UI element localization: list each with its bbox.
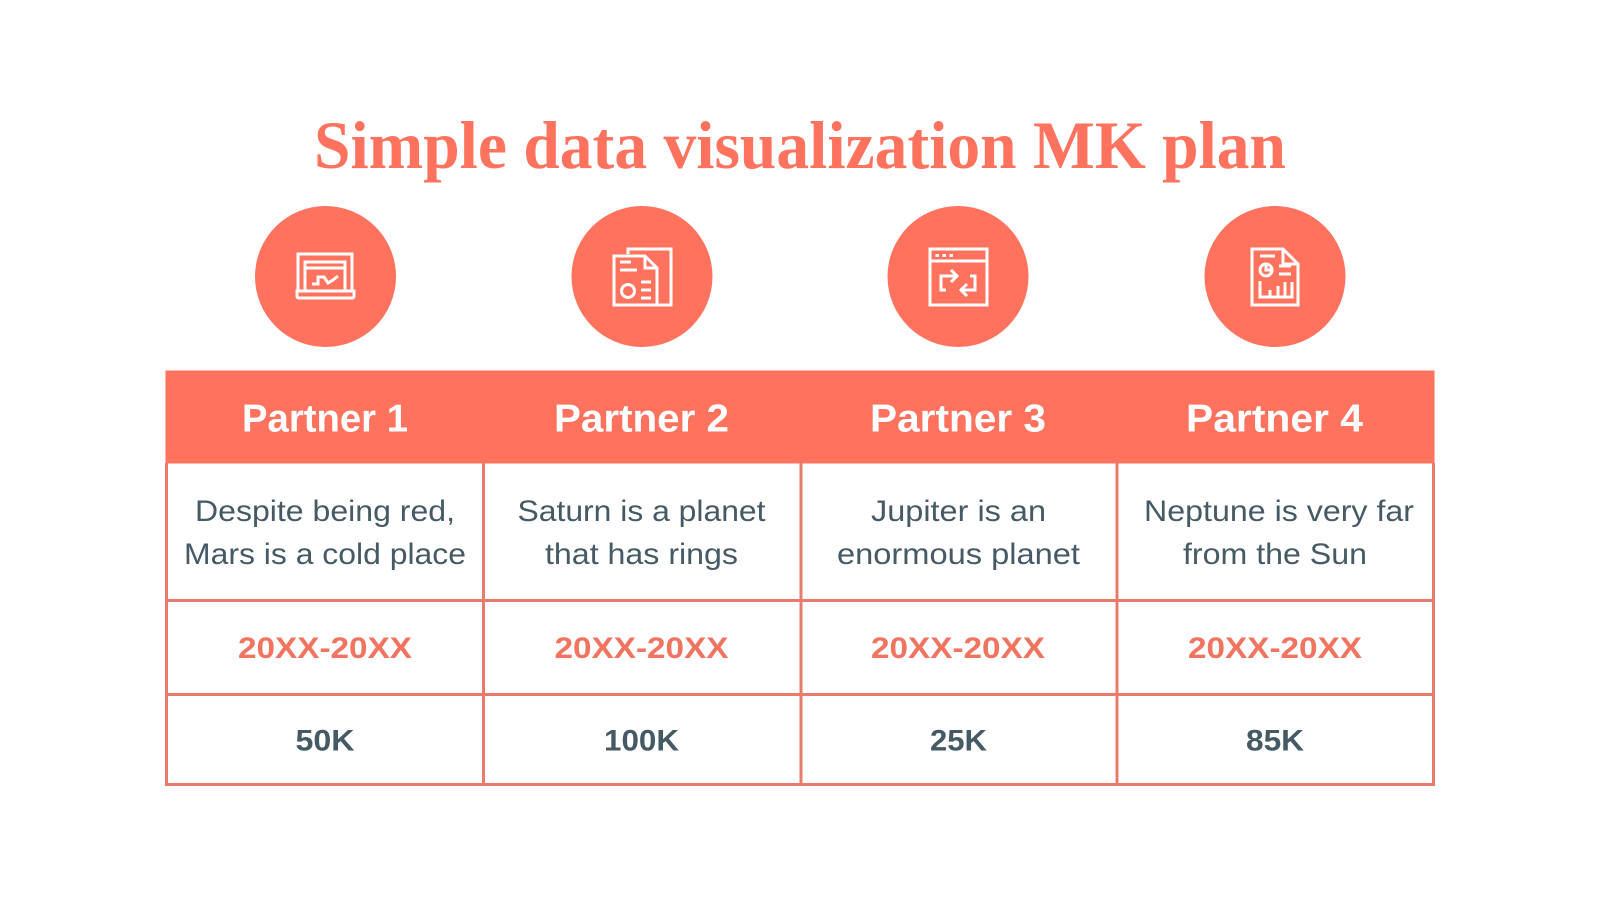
column: Partner 3: Jupiter is an — [871, 495, 1046, 528]
column: Partner 2: Partner 2 — [554, 398, 729, 440]
column: Partner 4: 85K — [1246, 724, 1304, 758]
column: Partner 3: 20XX-20XX — [871, 632, 1045, 665]
column: Partner 4: Partner 4 — [1186, 398, 1363, 440]
table header bar — [166, 370, 1434, 464]
column: Partner 2: 100K — [604, 724, 679, 758]
column: Partner 4: 20XX-20XX — [1188, 632, 1362, 665]
column: Partner 3: 25K — [930, 724, 987, 758]
column: Partner 1 — [184, 398, 466, 758]
title: Simple data visualization MK plan — [314, 107, 1286, 183]
column: Partner 2: Saturn is a planet — [518, 495, 766, 528]
column: Partner 2 — [518, 398, 766, 758]
icon: report document — [1204, 206, 1346, 347]
column: Partner 1: 20XX-20XX — [238, 632, 412, 665]
column: Partner 1: Mars is a cold place — [184, 538, 466, 571]
column: Partner 4 — [1144, 398, 1414, 758]
column: Partner 3: enormous planet — [837, 538, 1081, 571]
icon: documents — [572, 206, 712, 347]
column: Partner 2: 20XX-20XX — [554, 632, 728, 665]
column: Partner 4: Neptune is very far — [1144, 495, 1414, 528]
column: Partner 3 — [837, 398, 1081, 758]
icon: laptop with line chart — [255, 206, 396, 347]
icon: browser window with arrows — [888, 206, 1028, 347]
column: Partner 2: that has rings — [545, 538, 738, 571]
column: Partner 3: Partner 3 — [870, 398, 1046, 440]
column: Partner 1: 50K — [296, 724, 355, 758]
table grid — [166, 463, 1434, 784]
column: Partner 4: from the Sun — [1183, 538, 1367, 571]
table — [166, 370, 1434, 784]
column: Partner 1: Despite being red, — [195, 495, 455, 528]
column: Partner 1: Partner 1 — [242, 398, 408, 440]
